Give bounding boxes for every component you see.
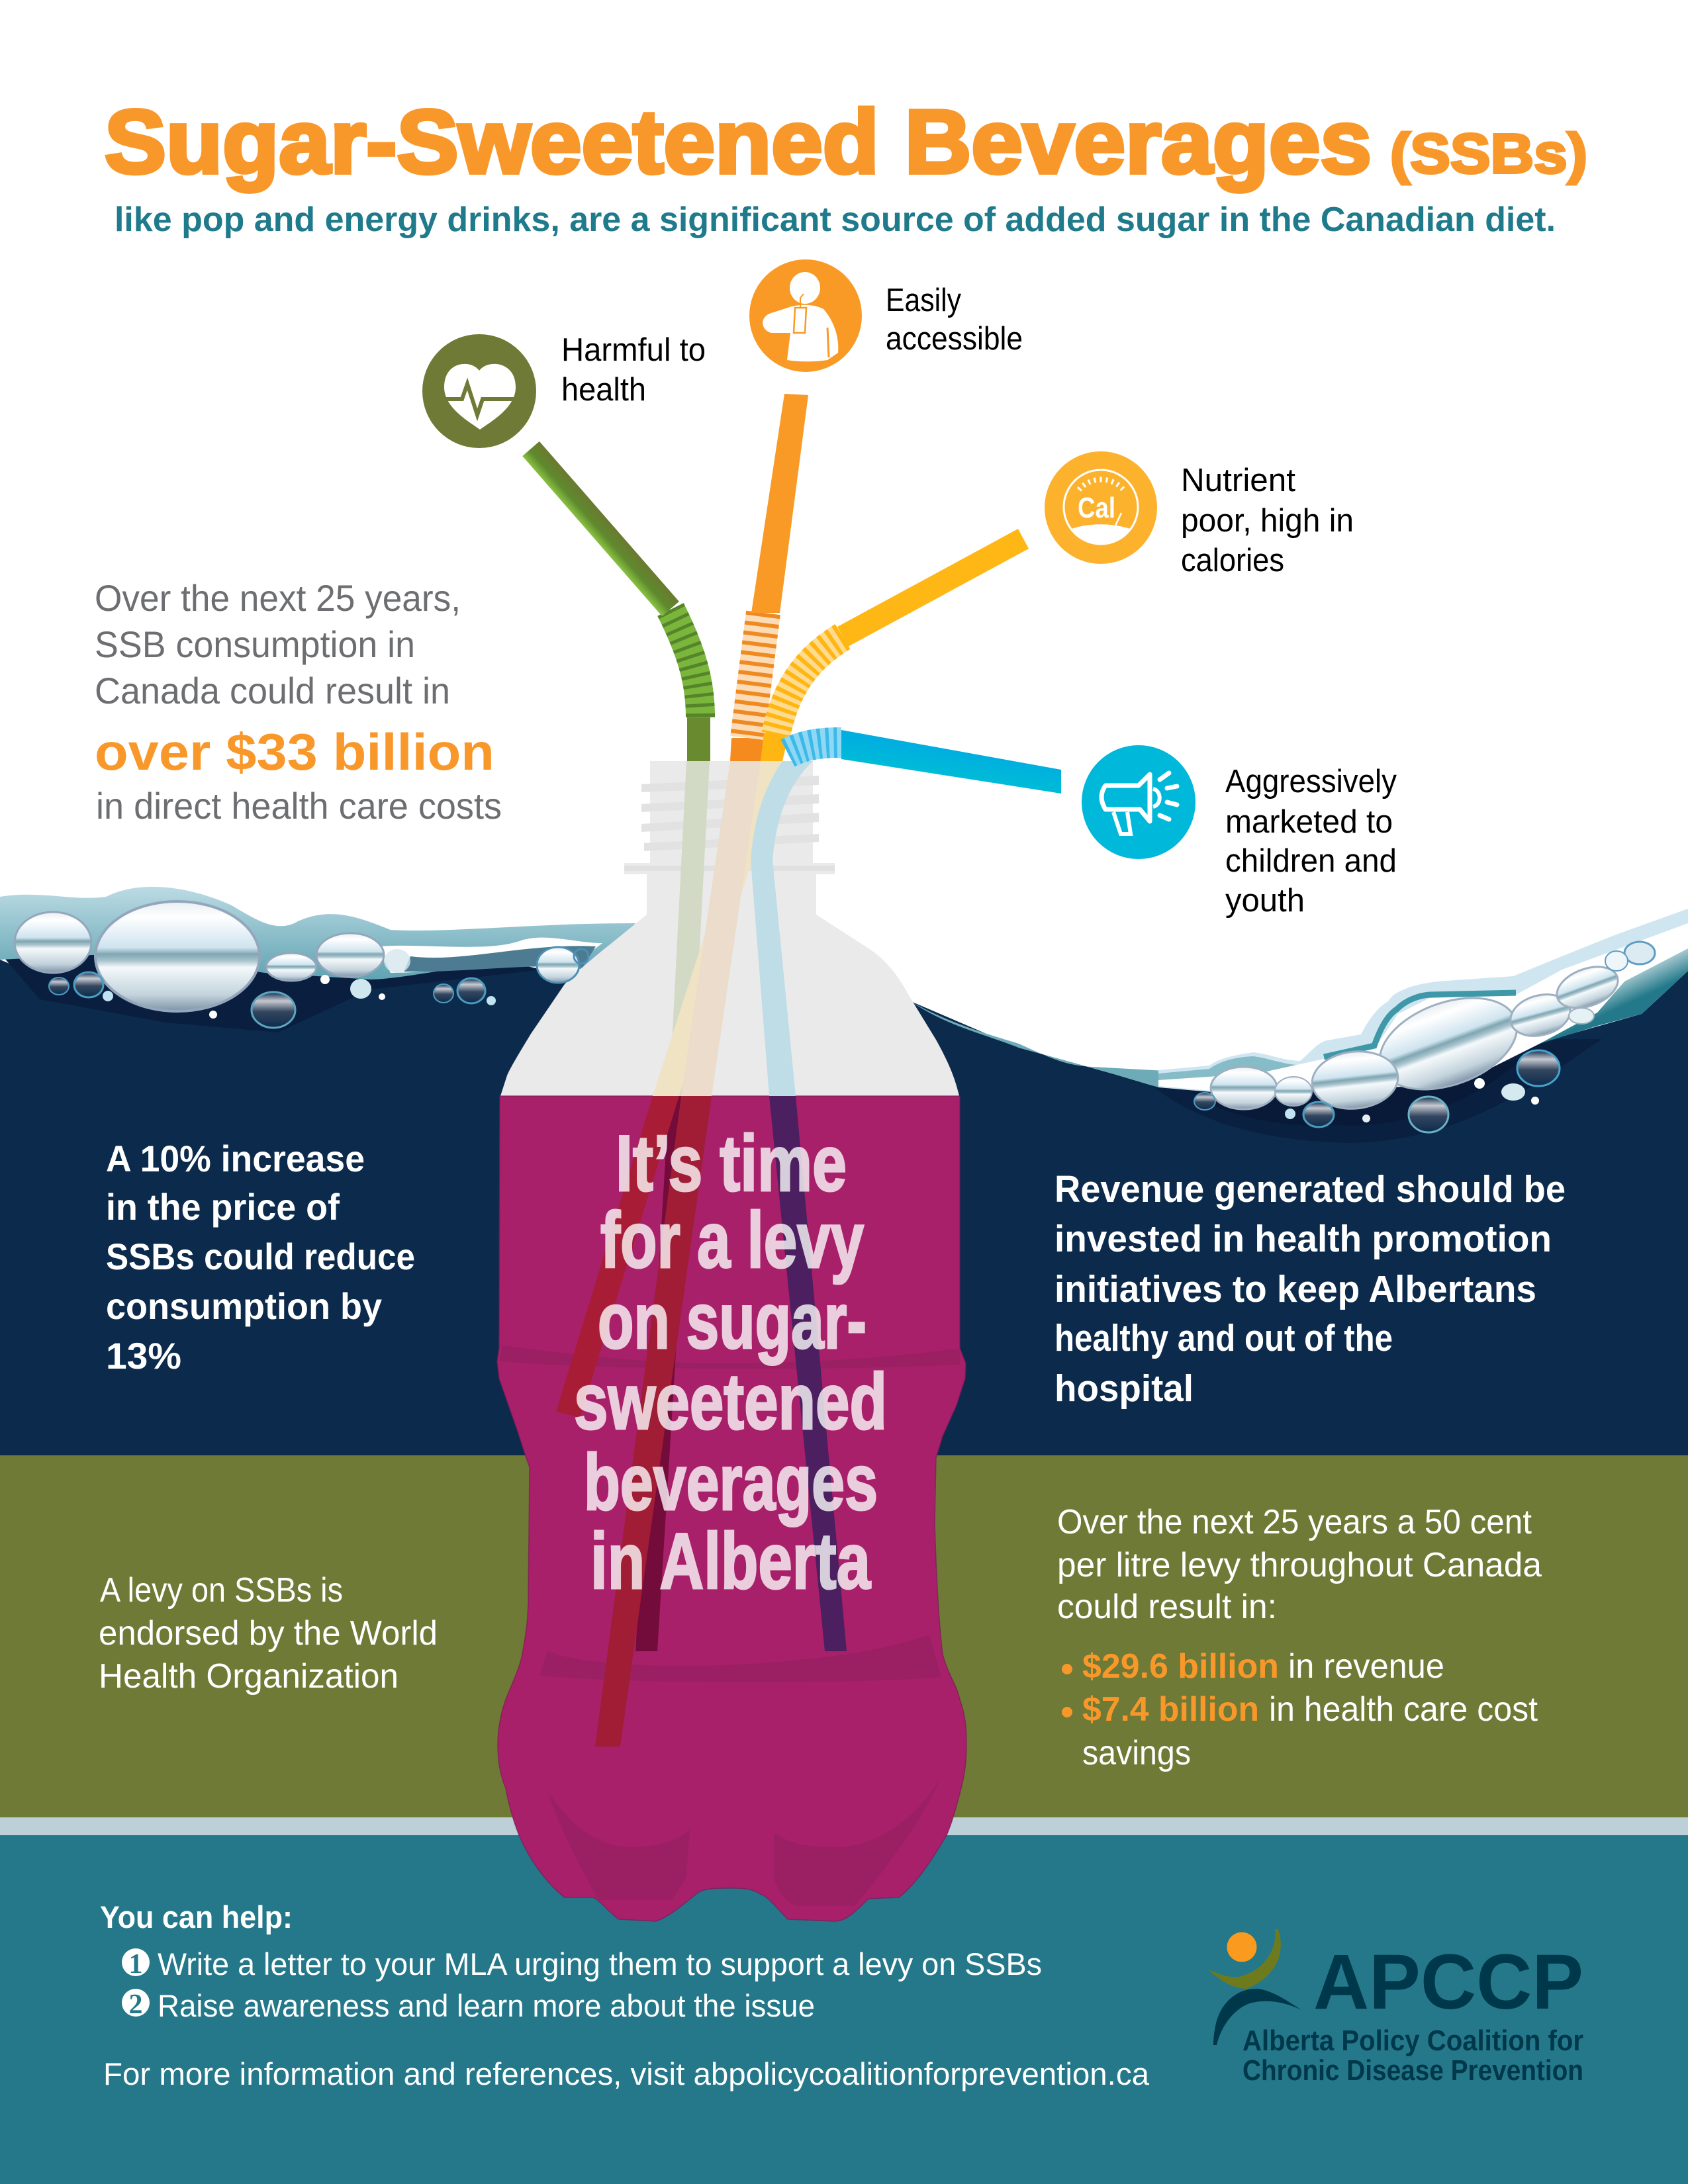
white inner surface	[1158, 923, 1688, 1091]
label: aggressively marketed: children and	[1225, 843, 1397, 879]
dark bubbles	[74, 972, 103, 997]
straw: orange	[730, 394, 808, 761]
label: aggressively marketed: youth	[1225, 883, 1305, 919]
bubble large	[95, 901, 259, 1011]
label: harmful to health	[561, 332, 706, 408]
straw submerged: orange	[595, 761, 761, 1747]
orange straw lower	[730, 738, 764, 761]
label: easily accessible	[886, 283, 1023, 357]
text block: price increase: in the price of	[106, 1186, 340, 1228]
bubbles	[1367, 981, 1530, 1107]
label: aggressively marketed	[1225, 764, 1397, 919]
bottle neck and threads	[624, 761, 835, 915]
straw submerged: yellow	[556, 761, 782, 1418]
text block: revenue: invested in health promotion	[1055, 1218, 1552, 1260]
text block: price increase: 13%	[106, 1335, 181, 1377]
bubble mid	[266, 953, 316, 981]
bottle	[497, 761, 966, 1921]
icon: calorie gauge	[1045, 451, 1157, 564]
headline on bottle: beverages	[584, 1438, 878, 1527]
headline on bottle: sweetened	[574, 1357, 887, 1446]
text block: price increase: SSBs could reduce	[106, 1236, 415, 1277]
label: nutrient poor: calories	[1181, 543, 1284, 578]
text block: health care costs: in direct health care costs	[96, 785, 502, 827]
text block: revenue: initiatives to keep Albertans	[1055, 1268, 1536, 1310]
text block: levy results: Over the next 25 years a 50 cent	[1057, 1503, 1532, 1541]
text block: levy results: per litre levy throughout Canada	[1057, 1546, 1542, 1584]
text block: price increase: A 10% increase	[106, 1138, 365, 1179]
yellow straw top	[843, 539, 1023, 637]
shadow under the wave	[1152, 1039, 1602, 1143]
straw submerged: green	[635, 761, 710, 1651]
text block: revenue: healthy and out of the	[1055, 1317, 1393, 1359]
headline on bottle: on sugar-	[598, 1277, 867, 1365]
teal line	[1324, 993, 1516, 1057]
text block: you can help: For more information and references, visit abpolicycoalitionforprevention.ca	[103, 2056, 1150, 2091]
label: easily accessible: Easily	[886, 283, 961, 318]
bottle ridge shading	[499, 1345, 960, 1369]
subtitle: like pop and energy drinks, are a significant source of added sugar in the Canadian diet.	[115, 201, 1556, 239]
text block: you can help: 1	[128, 1949, 143, 1979]
panel: olive band	[0, 1455, 1688, 1817]
panel: navy water band	[0, 960, 1688, 1455]
blue straw top	[841, 730, 1061, 794]
label: aggressively marketed: marketed to	[1225, 804, 1393, 840]
green straw top	[531, 449, 671, 609]
green straw ribbed bend	[671, 610, 700, 717]
panel: teal footer	[0, 1835, 1688, 2184]
text block: price increase: consumption by	[106, 1285, 382, 1327]
text block: you can help: Write a letter to your MLA urging them to support a levy on SSBs	[158, 1946, 1042, 1981]
text block: revenue	[1055, 1168, 1566, 1410]
text block: levy results: could result in:	[1057, 1588, 1277, 1626]
divider band	[0, 1817, 1688, 1835]
text block: you can help	[100, 1899, 1150, 2091]
text block: price increase	[106, 1138, 415, 1377]
label: nutrient poor: poor, high in	[1181, 503, 1354, 539]
orange ribbed section	[747, 613, 763, 738]
label: easily accessible: accessible	[886, 321, 1023, 357]
text block: you can help: Raise awareness and learn more about the issue	[158, 1988, 815, 2023]
text block: WHO endorsement: endorsed by the World	[99, 1614, 438, 1653]
straw: green	[531, 449, 710, 761]
text block: WHO endorsement	[99, 1571, 438, 1696]
green straw lower	[687, 717, 710, 761]
text block: health care costs	[95, 577, 502, 827]
label: aggressively marketed: Aggressively	[1225, 764, 1397, 799]
blue ribbed bend	[788, 743, 841, 753]
title: Sugar-Sweetened Beverages	[105, 91, 1372, 192]
text block: levy results: in health care cost	[1269, 1690, 1538, 1729]
straw: yellow	[761, 539, 1023, 761]
icon: heart	[422, 334, 536, 448]
bubble right	[316, 933, 384, 977]
text block: health care costs: SSB consumption in	[95, 623, 415, 665]
text block: levy results: $7.4 billion	[1082, 1690, 1259, 1729]
headline on bottle	[574, 1119, 887, 1606]
text block: levy results	[1057, 1503, 1542, 1772]
bottle shoulder	[500, 915, 959, 1096]
text block: health care costs: over $33 billion	[95, 723, 494, 781]
text block: levy results: in revenue	[1288, 1647, 1444, 1686]
water surface left	[0, 887, 635, 1032]
headline on bottle: It’s time	[616, 1119, 847, 1208]
water surface right	[911, 909, 1688, 1143]
thin sliver by the bottle	[911, 1001, 1165, 1087]
headline on bottle: for a levy	[600, 1196, 864, 1285]
bubble at bottle edge	[537, 947, 588, 983]
logo: APCCP: Alberta Policy Coalition for	[1243, 2025, 1583, 2057]
text block: health care costs: Over the next 25 years,	[95, 577, 461, 619]
teal shoulder	[1540, 948, 1688, 1044]
headline on bottle: in Alberta	[590, 1517, 871, 1606]
text block: levy results: savings	[1082, 1734, 1191, 1772]
label: nutrient poor: Nutrient	[1181, 463, 1295, 498]
text block: levy results: $29.6 billion	[1082, 1647, 1279, 1686]
label: nutrient poor	[1181, 463, 1354, 578]
label: harmful to health: Harmful to	[561, 332, 706, 368]
logo: APCCP: Chronic Disease Prevention	[1243, 2054, 1583, 2087]
icon: calorie gauge: Cal	[1078, 492, 1115, 524]
text block: revenue: Revenue generated should be	[1055, 1168, 1566, 1210]
label: harmful to health: health	[561, 372, 646, 408]
straw submerged: blue	[751, 761, 847, 1651]
bubble left	[15, 912, 91, 973]
logo: APCCP	[1209, 1929, 1583, 2087]
dark shadow under the wave	[0, 953, 543, 1032]
title: (SSBs)	[1390, 122, 1587, 185]
logo: APCCP: APCCP	[1313, 1938, 1583, 2026]
text block: health care costs: Canada could result in	[95, 670, 450, 711]
orange straw top	[751, 394, 808, 613]
pale crest	[1158, 909, 1688, 1092]
teal bump left	[1158, 1056, 1307, 1085]
text block: revenue: hospital	[1055, 1367, 1194, 1410]
bottle liquid	[497, 1096, 966, 1921]
text block: you can help: 2	[128, 1989, 143, 2020]
icon: person drinking	[749, 259, 862, 372]
straw: blue	[788, 730, 1061, 794]
yellow straw lower	[761, 733, 789, 761]
yellow ribbed bend	[776, 637, 843, 735]
teal crest	[0, 887, 635, 979]
text block: you can help: You can help:	[100, 1899, 293, 1934]
text block: WHO endorsement: A levy on SSBs is	[100, 1571, 343, 1610]
text block: WHO endorsement: Health Organization	[99, 1657, 399, 1696]
icon: megaphone	[1082, 745, 1196, 859]
